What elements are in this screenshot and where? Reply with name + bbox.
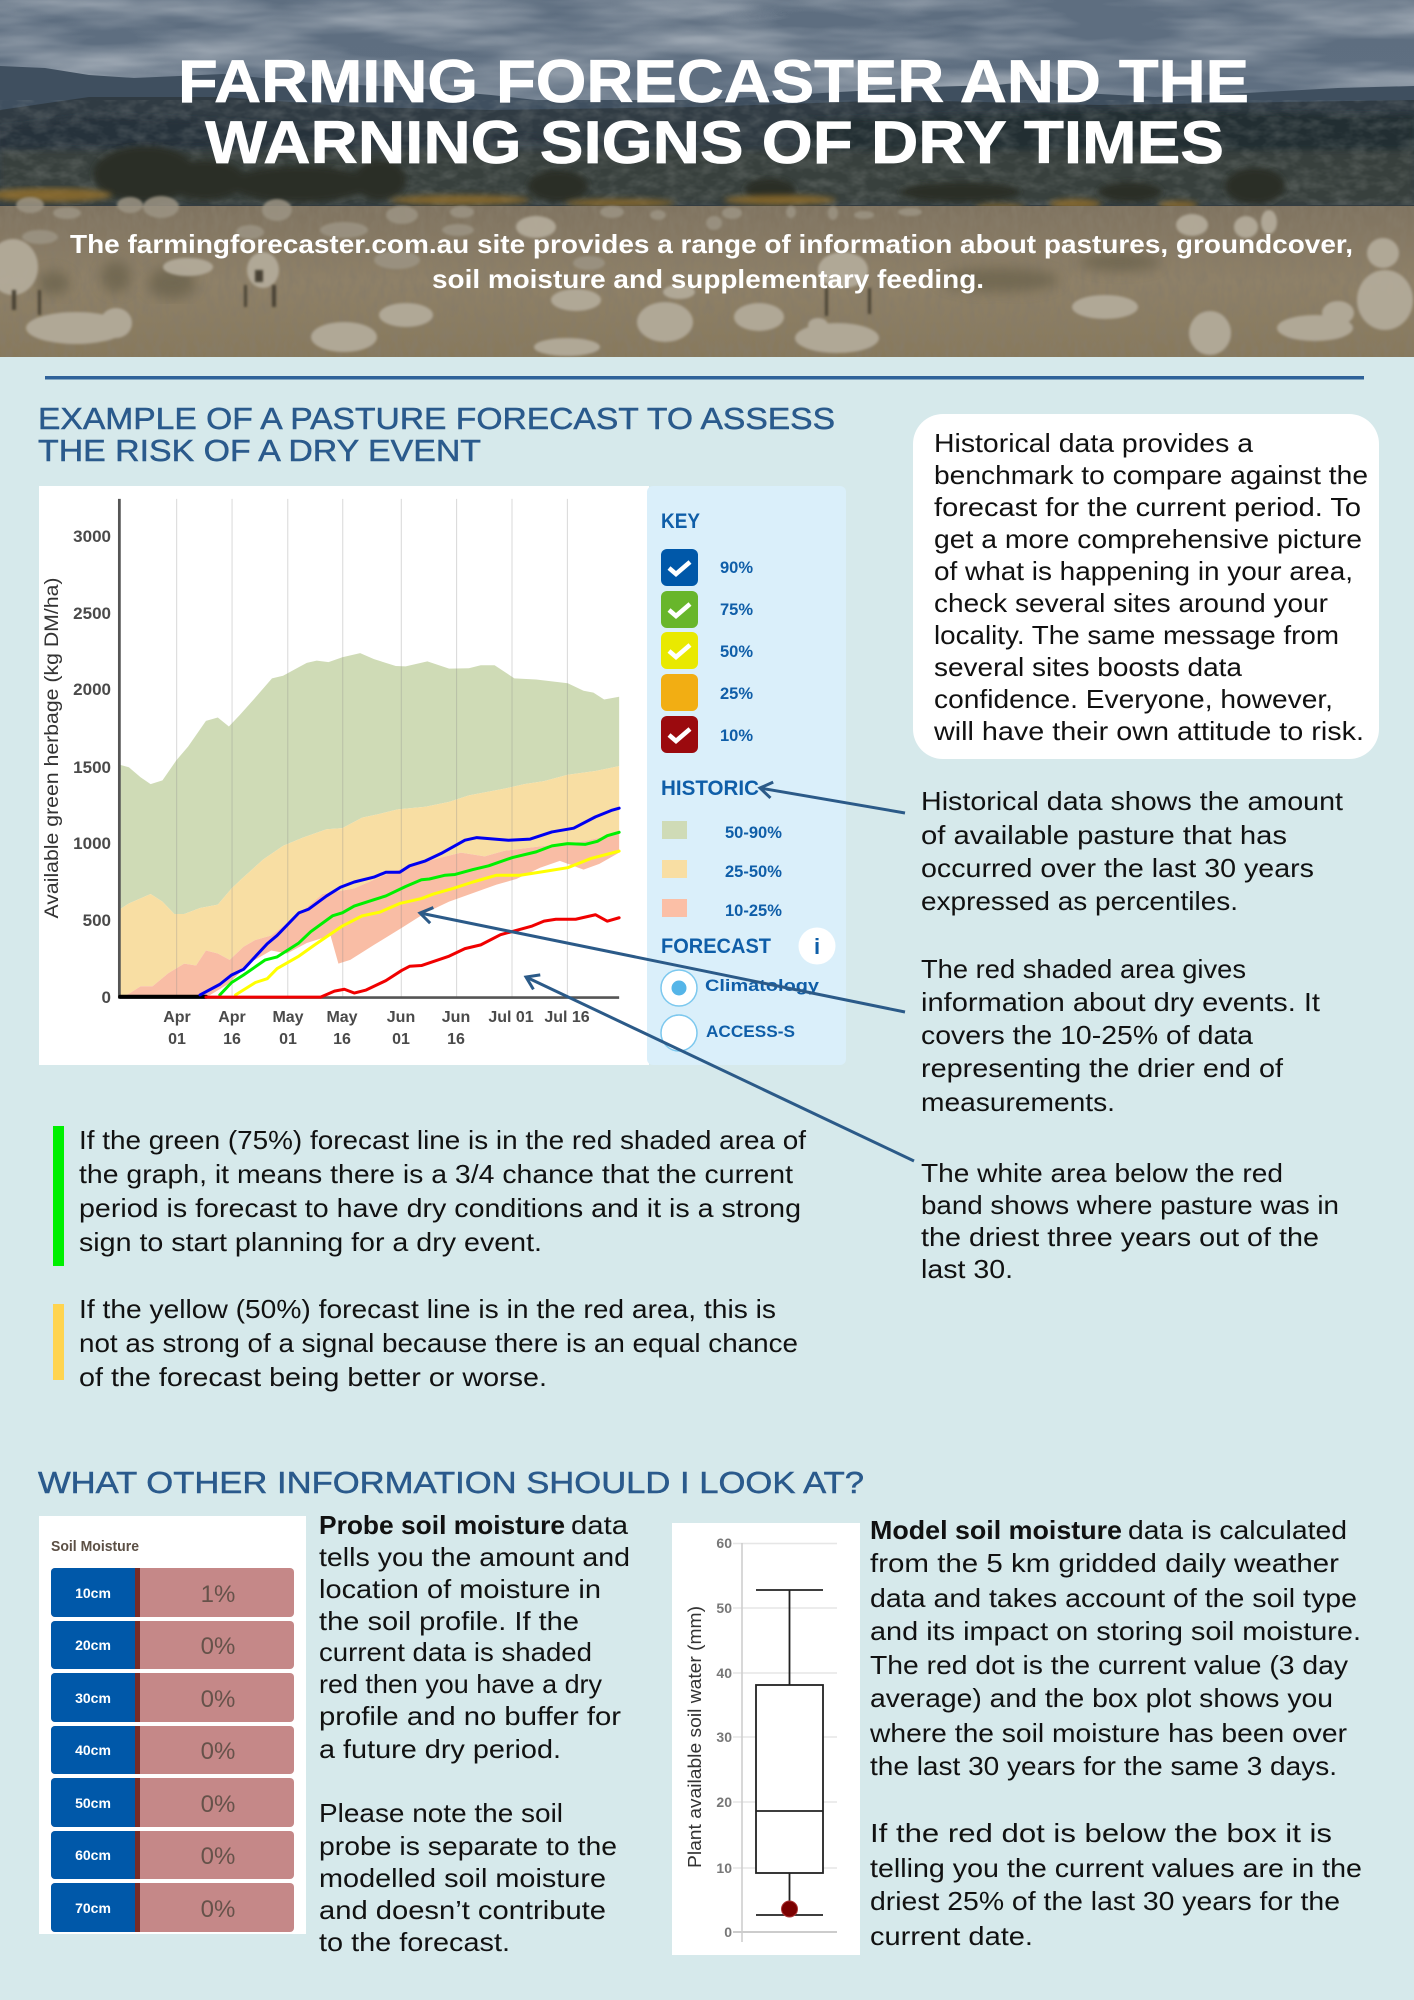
arrow: to red shaded area (420, 913, 905, 1012)
text: model soil moisture: from the 5 km gridded daily weather (870, 1548, 1339, 1578)
row: 50cm (51, 1778, 294, 1827)
row: 20cm (51, 1621, 294, 1669)
callout: yellow forecast line: not as strong of a signal because there is an equal chance (79, 1328, 798, 1358)
row: 30cm (51, 1673, 294, 1722)
legend: 50-90% (662, 821, 782, 842)
text: white area: band shows where pasture was in (921, 1190, 1339, 1220)
subtitle: The farmingforecaster.com.au site provides a range of information about pastures, groundcover, (70, 229, 1353, 259)
x axis labels: 01 (168, 1031, 186, 1048)
legend: 50%: 50% (720, 643, 753, 661)
x axis labels: 16 (223, 1031, 241, 1048)
text: probe soil moisture: profile and no buffer for (319, 1701, 621, 1731)
text: probe soil moisture: modelled soil moisture (319, 1863, 606, 1893)
text: historical percentiles: Historical data shows the amount (921, 786, 1344, 816)
tussocks (38, 253, 1160, 299)
text: white area: last 30. (921, 1254, 1013, 1284)
row: 40cm (51, 1726, 294, 1774)
legend: 10%: 10% (720, 727, 753, 745)
row: 60cm (51, 1831, 294, 1879)
arrow: to white area (526, 977, 914, 1161)
row: 70cm: 0% (201, 1896, 235, 1923)
subtitle (70, 229, 1353, 294)
box plot axis values: 50 (716, 1600, 732, 1616)
x axis labels: 16 (333, 1031, 351, 1048)
sheep legs (12, 270, 871, 316)
callout: green forecast line: period is forecast to have dry conditions and it is a strong (79, 1193, 801, 1223)
radio: Climatology: Climatology (705, 976, 820, 995)
legend: 10-25%: 10-25% (725, 902, 782, 920)
legend: 75%: 75% (720, 601, 753, 619)
x axis labels: 16 (447, 1031, 465, 1048)
text: historical percentiles: expressed as percentiles. (921, 886, 1238, 916)
y axis labels: 1000 (73, 834, 111, 853)
box plot axis title: Plant available soil water (mm) (685, 1606, 705, 1868)
text: model soil moisture: and its impact on storing soil moisture. (870, 1616, 1361, 1646)
text: model soil moisture: telling you the current values are in the (870, 1853, 1362, 1883)
legend: 10-25% (662, 899, 782, 920)
legend: 50-90%: 50-90% (725, 824, 782, 842)
row: 30cm: 30cm (75, 1690, 111, 1706)
x axis labels: Apr (218, 1009, 246, 1026)
box plot axis values: 0 (724, 1924, 732, 1940)
text: historical data benchmark callout (913, 414, 1379, 759)
icon: info (798, 928, 836, 964)
x axis labels: 01 (279, 1031, 297, 1048)
y axis labels: 2500 (73, 604, 111, 623)
text: red shaded area (921, 954, 1321, 1117)
callout: yellow forecast line: If the yellow (50%) forecast line is in the red area, this is (79, 1294, 776, 1324)
row: 70cm (51, 1883, 294, 1932)
text: model soil moisture: The red dot is the current value (3 day (870, 1650, 1348, 1680)
text: white area: The white area below the red (921, 1158, 1283, 1188)
text: historical data benchmark callout: check several sites around your (934, 588, 1328, 618)
box and whiskers (756, 1590, 823, 1915)
legend: 75% (661, 591, 753, 628)
text: probe soil moisture (319, 1510, 630, 1957)
legend: 25%: 25% (720, 685, 753, 703)
callout: green forecast line: the graph, it means there is a 3/4 chance that the current (79, 1159, 794, 1189)
x axis labels: Jul 01 (488, 1009, 534, 1026)
chart: pasture forecast (39, 486, 649, 1065)
row: 20cm: 20cm (75, 1637, 111, 1653)
box plot axis values: 20 (716, 1794, 732, 1810)
callout: yellow forecast line: of the forecast being better or worse. (79, 1362, 547, 1392)
text: probe soil moisture: location of moisture in (319, 1574, 601, 1604)
heading: other information: WHAT OTHER INFORMATION SHOULD I LOOK AT? (38, 1465, 864, 1500)
text: historical data benchmark callout: forecast for the current period. To (934, 492, 1361, 522)
heading: pasture forecast example: EXAMPLE OF A PASTURE FORECAST TO ASSESS (38, 401, 835, 436)
text: model soil moisture: the last 30 years for the same 3 days. (870, 1751, 1337, 1781)
y axis labels: 1500 (73, 758, 111, 777)
callout: green forecast line: If the green (75%) forecast line is in the red shaded area of (79, 1125, 807, 1155)
current value dot (782, 1901, 798, 1917)
title: WARNING SIGNS OF DRY TIMES (205, 109, 1224, 176)
text: white area: the driest three years out of the (921, 1222, 1319, 1252)
text: red shaded area: representing the drier end of (921, 1053, 1284, 1083)
text: probe soil moisture: red then you have a dry (319, 1669, 602, 1699)
row: 20cm: 0% (201, 1633, 235, 1660)
header photo: sheep grazing in a paddock (0, 0, 1414, 357)
box plot axis values (716, 1535, 732, 1940)
text: probe soil moisture: Please note the soil (319, 1798, 563, 1828)
x axis labels: May (272, 1009, 304, 1026)
callout: yellow forecast line (53, 1294, 798, 1392)
row: 30cm: 0% (201, 1686, 235, 1713)
text: model soil moisture: If the red dot is below the box it is (870, 1818, 1332, 1848)
panel: chart legend (647, 486, 846, 1065)
text: historical percentiles: occurred over the last 30 years (921, 853, 1314, 883)
text: probe soil moisture: probe is separate to the (319, 1831, 617, 1861)
text: historical percentiles (921, 786, 1344, 916)
text: probe soil moisture: tells you the amount and (319, 1542, 630, 1572)
box plot axis values: 30 (716, 1729, 732, 1745)
x axis labels: Apr (163, 1009, 191, 1026)
text: probe soil moisture: to the forecast. (319, 1927, 510, 1957)
row: 40cm: 0% (201, 1738, 235, 1765)
text: historical data benchmark callout: Historical data provides a (934, 428, 1254, 458)
legend: 90%: 90% (720, 559, 753, 577)
text: model soil moisture: Model soil moisture (870, 1515, 1122, 1545)
text: red shaded area: information about dry events. It (921, 987, 1321, 1017)
legend: KEY heading: KEY (661, 510, 700, 533)
row: 60cm: 60cm (75, 1847, 111, 1863)
radio: Climatology (661, 970, 820, 1006)
text: historical data benchmark callout: will have their own attitude to risk. (933, 716, 1364, 746)
box plot axis values: 60 (716, 1535, 732, 1551)
legend: 10% (661, 716, 753, 753)
radio: ACCESS-S (661, 1015, 795, 1051)
text: white area (921, 1158, 1339, 1284)
title (178, 48, 1249, 176)
y axis labels (73, 527, 111, 1007)
y axis title: Available green herbage (kg DM/ha) (42, 578, 63, 918)
y axis labels: 2000 (73, 680, 111, 699)
title: FARMING FORECASTER AND THE (178, 48, 1249, 115)
near sheep (0, 210, 1413, 356)
text: probe soil moisture: Probe soil moisture (319, 1510, 565, 1540)
legend: 25-50% (662, 860, 782, 881)
text: probe soil moisture: current data is shaded (319, 1637, 592, 1667)
row: 60cm: 0% (201, 1843, 235, 1870)
row: 40cm: 40cm (75, 1742, 111, 1758)
legend: HISTORIC heading: HISTORIC (661, 777, 759, 800)
box plot axis values: 40 (716, 1665, 732, 1681)
text: probe soil moisture: a future dry period. (319, 1734, 561, 1764)
plot areas and forecast lines (119, 499, 619, 999)
text: model soil moisture: current date. (870, 1921, 1033, 1951)
legend: 25-50%: 25-50% (725, 863, 782, 881)
row: 10cm: 1% (201, 1581, 235, 1608)
arrow: to historic legend (760, 788, 905, 813)
text: model soil moisture: data and takes account of the soil type (870, 1583, 1357, 1613)
legend: 90% (661, 549, 753, 586)
text: model soil moisture (869, 1515, 1362, 1951)
y axis labels: 500 (83, 911, 111, 930)
x axis labels: Jun (442, 1009, 470, 1026)
text: probe soil moisture: and doesn’t contribute (319, 1895, 606, 1925)
text: historical data benchmark callout: locality. The same message from (934, 620, 1339, 650)
x axis labels: May (326, 1009, 358, 1026)
text: red shaded area: measurements. (921, 1087, 1115, 1117)
text: probe soil moisture: data (571, 1510, 629, 1540)
text: probe soil moisture: the soil profile. If the (319, 1606, 579, 1636)
text: historical data benchmark callout: benchmark to compare against the (934, 460, 1368, 490)
panel: soil moisture probe table: Soil Moisture (51, 1539, 139, 1555)
radio: ACCESS-S: ACCESS-S (706, 1022, 795, 1041)
text: red shaded area: covers the 10-25% of data (921, 1020, 1254, 1050)
text: historical data benchmark callout: of what is happening in your area, (934, 556, 1353, 586)
legend: FORECAST heading: FORECAST (661, 935, 771, 958)
y axis labels: 3000 (73, 527, 111, 546)
chart: plant available soil water box plot (672, 1523, 860, 1955)
box plot axis values: 10 (716, 1860, 732, 1876)
heading: pasture forecast example (38, 401, 835, 468)
row: 10cm: 10cm (75, 1585, 111, 1601)
heading: pasture forecast example: THE RISK OF A DRY EVENT (38, 433, 481, 468)
callout: green forecast line (53, 1125, 807, 1266)
text: model soil moisture: where the soil moisture has been over (869, 1718, 1347, 1748)
row: 70cm: 70cm (75, 1900, 111, 1916)
text: historical percentiles: of available pasture that has (921, 820, 1287, 850)
row: 50cm: 50cm (75, 1795, 111, 1811)
legend: 25% (661, 674, 753, 711)
icon: info: i (814, 934, 820, 959)
distant sheep (16, 196, 922, 270)
subtitle: soil moisture and supplementary feeding. (432, 264, 984, 294)
text: model soil moisture: average) and the box plot shows you (870, 1683, 1333, 1713)
x axis labels: Jun (387, 1009, 415, 1026)
dark tree clumps (93, 146, 1285, 204)
text: model soil moisture: data is calculated (1128, 1515, 1347, 1545)
x axis labels: 01 (392, 1031, 410, 1048)
text: red shaded area: The red shaded area gives (921, 954, 1246, 984)
row: 10cm (51, 1568, 294, 1617)
x axis labels: Jul 16 (544, 1009, 590, 1026)
panel: soil moisture probe table (39, 1516, 306, 1934)
text: model soil moisture: driest 25% of the last 30 years for the (870, 1886, 1340, 1916)
text: historical data benchmark callout: get a more comprehensive picture (934, 524, 1362, 554)
text: historical data benchmark callout: several sites boosts data (934, 652, 1243, 682)
orange shrubs (0, 188, 1198, 210)
x axis labels (163, 1009, 590, 1048)
text: historical data benchmark callout: confidence. Everyone, however, (934, 684, 1333, 714)
y axis labels: 0 (102, 988, 111, 1007)
row: 50cm: 0% (201, 1791, 235, 1818)
legend: 50% (661, 632, 753, 669)
callout: green forecast line: sign to start planning for a dry event. (79, 1227, 542, 1257)
